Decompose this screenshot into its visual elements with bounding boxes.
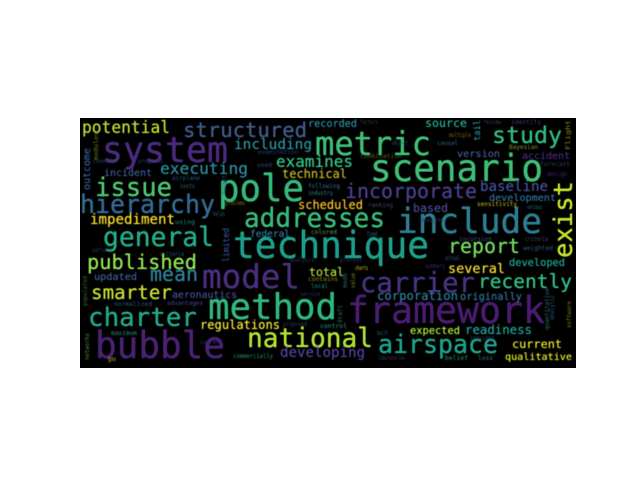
word: incorporate: incorporate	[345, 179, 477, 203]
small faint words: helps	[213, 211, 225, 218]
small faint words: local	[311, 283, 328, 290]
small faint words: laboratories	[378, 355, 405, 362]
word: hierarchy: hierarchy	[80, 190, 215, 220]
word: study: study	[492, 123, 562, 149]
small faint words: belief	[445, 355, 468, 362]
medium words	[82, 116, 572, 363]
medium words: aeronautics	[172, 290, 237, 301]
word: carrier: carrier	[360, 267, 475, 299]
medium words: originally	[460, 291, 522, 303]
small faint words: current	[200, 339, 222, 346]
small faint words: criteria	[160, 251, 184, 258]
word: recently: recently	[478, 270, 572, 293]
medium words: scheduled	[298, 198, 363, 212]
small faint words: progress	[138, 158, 163, 165]
small faint words: ranking	[368, 202, 393, 209]
medium words: regulations	[200, 318, 280, 332]
small faint words: normalized	[114, 301, 152, 308]
medium words: current	[512, 337, 562, 351]
small faint words: contains	[308, 276, 338, 283]
small faint words: charts	[355, 265, 368, 272]
word: technique: technique	[233, 224, 429, 267]
word: charter: charter	[88, 303, 197, 333]
small faint words: analysis	[290, 257, 314, 264]
small faint words: various	[527, 204, 542, 211]
small faint words: combination	[360, 153, 402, 160]
small faint words: summary	[425, 263, 445, 270]
small faint words: service	[300, 291, 320, 298]
medium words: developing	[280, 345, 365, 361]
medium words: incident	[104, 168, 152, 179]
medium words: outcome	[82, 148, 93, 190]
medium words: source	[425, 116, 467, 130]
panel: black word cloud background	[80, 118, 576, 368]
small faint words: provided	[470, 335, 494, 342]
medium words: several	[448, 261, 505, 277]
small faint words	[82, 119, 573, 363]
small faint words: commercially	[233, 353, 273, 360]
small faint words: industry	[308, 190, 333, 197]
small faint words: examination	[258, 149, 298, 156]
small faint words: quantitative	[544, 288, 551, 330]
word: including: including	[234, 137, 312, 153]
small faint words: review	[483, 119, 501, 126]
word: pole: pole	[218, 167, 304, 210]
word: issue: issue	[95, 173, 172, 203]
small faint words: sensitivity	[477, 201, 517, 208]
small faint words: maximum	[111, 330, 137, 337]
word: bubble: bubble	[95, 324, 225, 367]
medium words: updated	[94, 272, 137, 283]
small faint words: identify	[511, 119, 541, 126]
word: model: model	[202, 257, 300, 296]
medium words: development	[489, 193, 556, 204]
small faint words: colored	[311, 229, 337, 236]
word: impediment: impediment	[90, 212, 175, 228]
small faint words: costs	[180, 183, 195, 190]
small faint words: process	[340, 257, 362, 264]
small faint words: draft	[337, 305, 344, 323]
small faint words: multiple	[449, 132, 471, 139]
word: report: report	[448, 234, 520, 258]
medium words: corporation	[377, 289, 458, 303]
medium words: limited	[222, 228, 232, 262]
medium words: technical	[282, 167, 347, 181]
medium words: expected	[410, 325, 460, 337]
small faint words: control	[320, 323, 347, 330]
small faint words: measures	[420, 217, 444, 224]
word: scenario: scenario	[370, 147, 543, 190]
word: potential: potential	[82, 118, 170, 137]
small faint words: actual	[445, 255, 460, 262]
word: examines: examines	[276, 152, 353, 171]
small faint words: populated	[82, 276, 89, 306]
small faint words: built	[377, 330, 388, 337]
word: published: published	[87, 250, 197, 274]
small faint words: loss	[478, 355, 493, 362]
medium words: tail	[473, 120, 483, 141]
small faint words: factors	[360, 119, 378, 126]
small faint words: problems	[225, 200, 245, 207]
medium words: accident	[522, 151, 570, 162]
small faint words: software	[566, 301, 573, 328]
word: structured: structured	[183, 118, 307, 142]
word: mean: mean	[150, 262, 198, 286]
word: airspace: airspace	[378, 330, 498, 360]
small faint words: flight	[221, 175, 228, 195]
small faint words: using	[175, 219, 195, 226]
small faint words: consider	[93, 158, 118, 165]
medium words: version	[457, 149, 500, 160]
medium words: qualitative	[505, 352, 572, 363]
small faint words: proposed	[283, 321, 307, 328]
small faint words: gas	[108, 356, 116, 363]
small faint words: object	[392, 140, 408, 147]
word: smarter: smarter	[91, 281, 172, 304]
word: baseline: baseline	[480, 179, 548, 195]
medium words: developed	[509, 257, 565, 269]
small faint words: causal	[437, 140, 458, 147]
small faint words: Bayesian	[509, 144, 538, 151]
word: executing: executing	[160, 159, 248, 178]
medium words: based	[413, 201, 448, 215]
small faint words: following	[308, 183, 340, 190]
small faint words: various	[92, 247, 112, 254]
medium words: total	[309, 265, 344, 279]
medium words: federal	[250, 229, 290, 240]
word: national: national	[247, 323, 373, 354]
small faint words: Flight	[565, 119, 572, 150]
small faint words: analytic	[549, 295, 556, 320]
word: metric: metric	[315, 124, 431, 163]
word: general: general	[103, 222, 214, 253]
small faint words: modules	[93, 132, 100, 160]
word: exist (vertical): exist	[549, 181, 579, 258]
word: include: include	[397, 202, 542, 242]
small faint words: weighted	[523, 245, 553, 252]
small faint words: value	[350, 273, 357, 288]
word: method: method	[208, 287, 337, 328]
small faint words: advantages	[167, 300, 203, 307]
medium words: recorded	[308, 119, 357, 130]
small faint words: mode	[342, 273, 349, 288]
small faint words: forecast	[540, 161, 570, 168]
small faint words: criteria	[525, 236, 548, 243]
small faint words: airplane	[172, 175, 200, 182]
small faint words: design	[547, 171, 567, 178]
small faint words: incursion	[459, 236, 492, 243]
word: system: system	[102, 130, 228, 171]
word: framework: framework	[347, 289, 545, 332]
small faint words: networks	[84, 333, 91, 360]
small faint words: fixed	[367, 231, 377, 238]
medium words: readiness	[465, 322, 532, 337]
word cloud words	[80, 116, 579, 367]
word: addresses: addresses	[244, 203, 385, 234]
small faint words: used	[257, 162, 272, 169]
